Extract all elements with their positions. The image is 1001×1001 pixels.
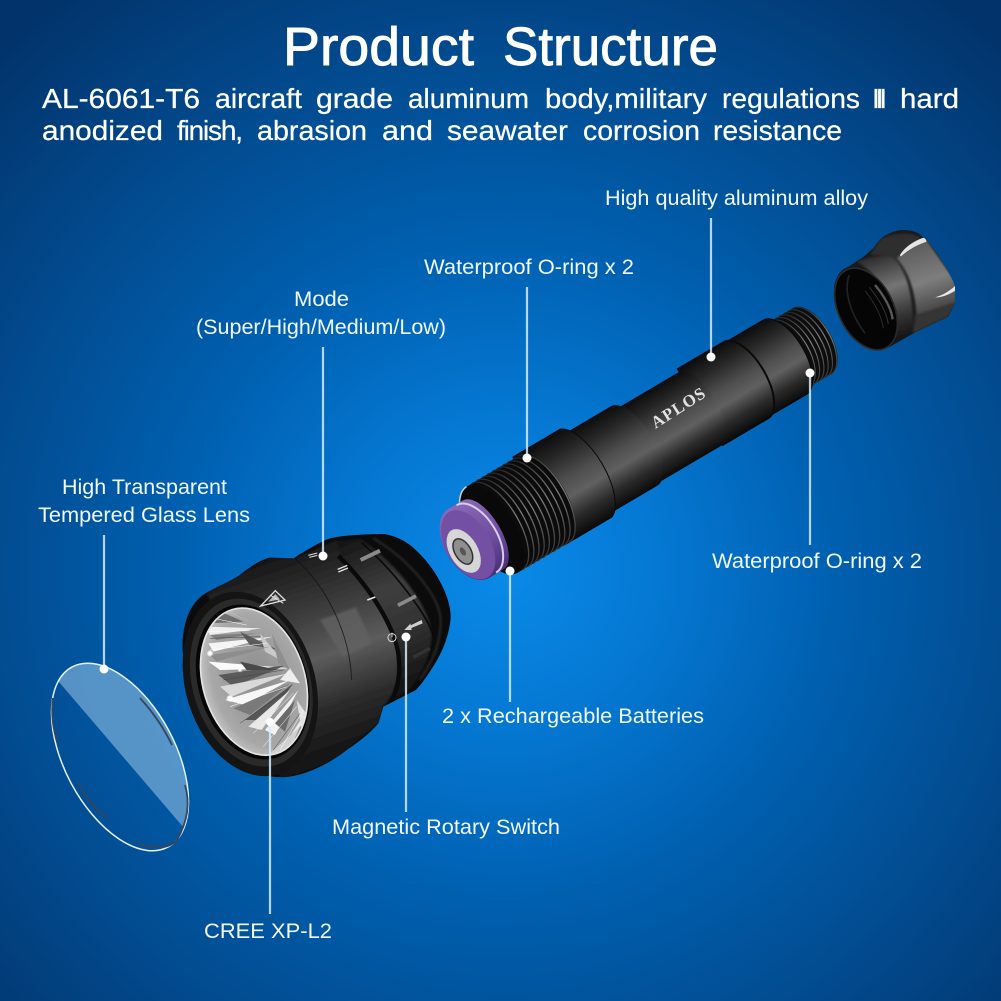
battery — [428, 491, 519, 590]
front rim — [161, 575, 340, 793]
label: mode: Mode — [294, 288, 349, 311]
leader: right o-ring — [806, 368, 814, 545]
power icon — [388, 633, 396, 642]
subtitle text: abrasion — [257, 115, 367, 146]
label: waterproof o-ring top: Waterproof O-ring x 2 — [424, 256, 634, 279]
label: batteries: 2 x Rechargeable Batteries — [442, 705, 704, 728]
tube step section — [678, 332, 786, 445]
subtitle text: corrosion — [583, 115, 700, 146]
leader: cree — [266, 718, 274, 914]
subtitle text: resistance — [713, 115, 842, 146]
main collar — [513, 420, 628, 545]
logo mark — [261, 591, 285, 606]
reflector rim — [183, 595, 325, 769]
tail cap — [834, 230, 955, 351]
label: rotary switch: Magnetic Rotary Switch — [332, 816, 560, 839]
ring band — [338, 556, 399, 702]
rotary ring — [337, 538, 432, 706]
subtitle text: aluminum — [408, 83, 529, 114]
subtitle text — [42, 83, 959, 146]
label: waterproof o-ring right: Waterproof O-ring x 2 — [712, 550, 922, 573]
body highlight — [320, 607, 366, 655]
label: mode — [196, 288, 446, 339]
label: high quality aluminum alloy: High quality aluminum alloy — [605, 187, 869, 210]
label: lens: Tempered Glass Lens — [38, 504, 250, 527]
subtitle text: III — [872, 83, 887, 114]
switch marks — [308, 551, 430, 657]
title — [283, 17, 718, 77]
leader: high quality aluminum — [706, 218, 716, 362]
reflector with LEDs — [200, 607, 308, 756]
subtitle text: and — [382, 115, 433, 146]
subtitle text: regulations — [722, 83, 860, 114]
second collar — [559, 396, 675, 516]
leader: rotary switch — [402, 632, 410, 812]
lens — [50, 662, 190, 852]
title: Structure — [503, 17, 718, 77]
rear ring — [373, 538, 441, 680]
subtitle text: AL-6061-T6 — [42, 83, 200, 114]
main tube — [609, 363, 737, 486]
flashlight head — [182, 534, 451, 778]
subtitle text: finish, — [177, 115, 243, 146]
brand: APLOS: APLOS — [647, 383, 710, 432]
label: cree: CREE XP-L2 — [204, 920, 332, 943]
leader: top o-ring — [522, 287, 532, 462]
flashlight barrel with battery — [422, 287, 854, 599]
front section — [207, 558, 352, 777]
subtitle text: aircraft — [215, 83, 302, 114]
title: Product — [283, 17, 474, 77]
head body — [177, 530, 457, 783]
subtitle text: anodized — [42, 115, 163, 146]
label: mode: (Super/High/Medium/Low) — [196, 316, 446, 339]
label: lens: High Transparent — [62, 476, 227, 499]
reflector glints — [207, 651, 272, 726]
tail threads — [761, 299, 848, 392]
threaded section — [447, 445, 589, 585]
subtitle text: body,military — [545, 83, 707, 114]
subtitle text: grade — [316, 83, 393, 114]
subtitle text: seawater — [447, 115, 568, 146]
arrow mark — [404, 620, 423, 630]
leader: mode — [318, 347, 328, 560]
subtitle text: hard — [900, 83, 959, 114]
label: lens — [38, 476, 250, 527]
tube rear section — [722, 310, 824, 419]
middle section — [295, 540, 399, 750]
leader: lens — [100, 535, 108, 674]
leader: batteries — [506, 566, 514, 702]
